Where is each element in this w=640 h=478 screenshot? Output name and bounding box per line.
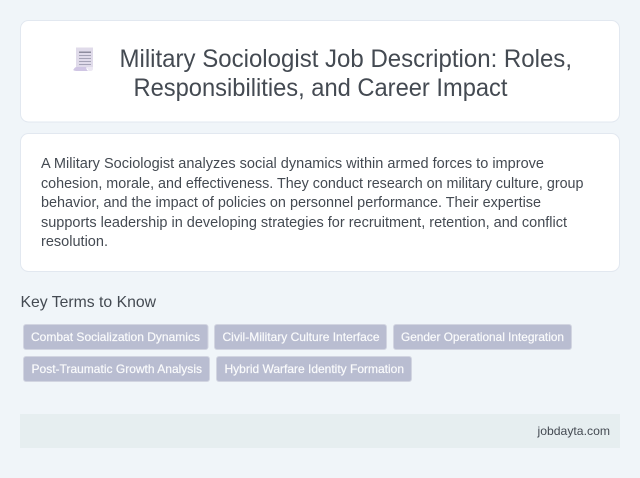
text block: description: behavior, and the impact of policies on personnel performance. Their expertise bbox=[41, 195, 541, 211]
title bbox=[120, 45, 572, 102]
panel: title card bbox=[20, 20, 620, 122]
tag: Civil-Military Culture Interface bbox=[214, 324, 386, 350]
title: Responsibilities, and Career Impact bbox=[134, 74, 508, 102]
tag: Gender Operational Integration: Gender Operational Integration bbox=[401, 330, 564, 344]
text block: description: supports leadership in developing strategies for recruitment, retention, and conflict bbox=[41, 215, 567, 231]
heading: key terms: Key Terms to Know bbox=[20, 294, 156, 311]
tag: Hybrid Warfare Identity Formation bbox=[216, 356, 412, 382]
tag list: key terms bbox=[24, 324, 572, 382]
tag: Post-Traumatic Growth Analysis: Post-Traumatic Growth Analysis bbox=[32, 362, 202, 376]
tag: Combat Socialization Dynamics bbox=[24, 324, 208, 350]
tag: Civil-Military Culture Interface: Civil-Military Culture Interface bbox=[222, 330, 380, 344]
text block: description: A Military Sociologist analyzes social dynamics within armed forces to improve bbox=[41, 156, 544, 172]
tag: Gender Operational Integration bbox=[394, 324, 572, 350]
text block: description bbox=[41, 156, 584, 250]
tag: Combat Socialization Dynamics: Combat Socialization Dynamics bbox=[31, 330, 200, 344]
title: Military Sociologist Job Description: Roles, bbox=[120, 45, 572, 73]
tag: Hybrid Warfare Identity Formation: Hybrid Warfare Identity Formation bbox=[224, 362, 404, 376]
footer bar: jobdayta.com bbox=[536, 424, 610, 438]
panel: description card bbox=[20, 134, 620, 272]
icon: document scroll bbox=[73, 48, 93, 71]
footer bar bbox=[20, 414, 620, 448]
text block: description: cohesion, morale, and effectiveness. They conduct research on military culture, group bbox=[41, 176, 584, 192]
tag: Post-Traumatic Growth Analysis bbox=[24, 356, 210, 382]
text block: description: resolution. bbox=[41, 234, 108, 250]
